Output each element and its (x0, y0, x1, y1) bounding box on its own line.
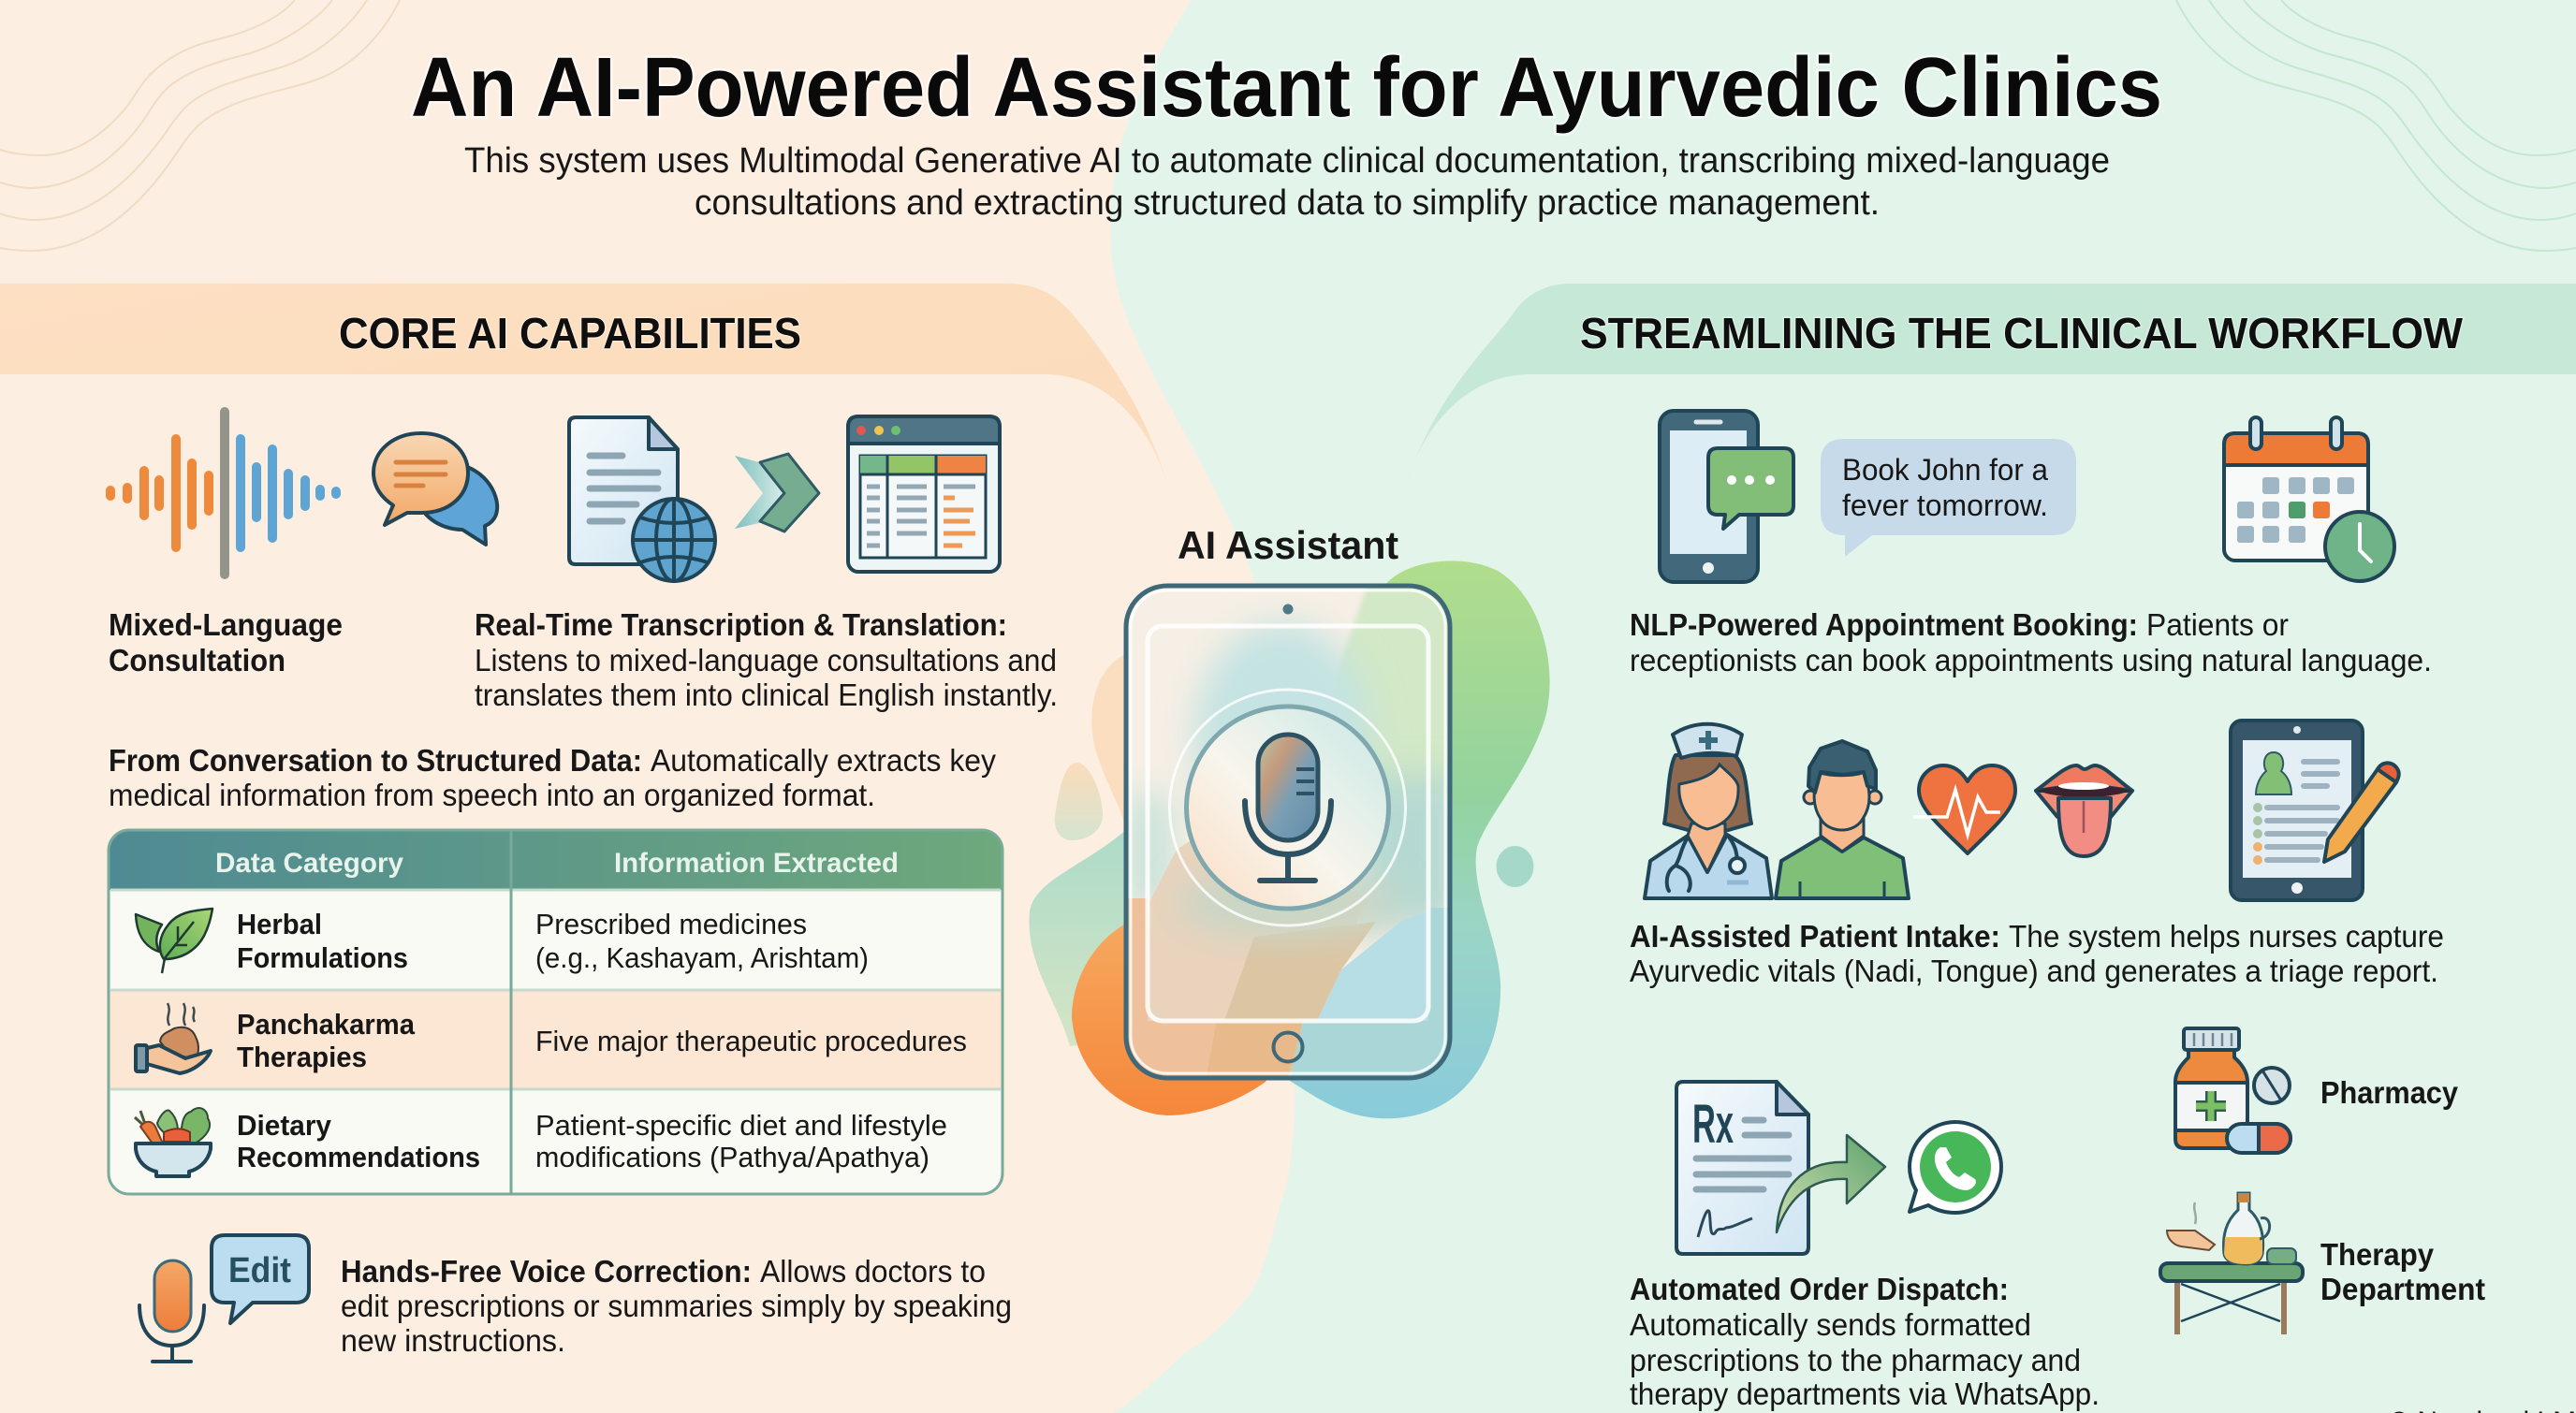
text block: AI-assisted patient intake: AI-Assisted Patient Intake: (1630, 919, 2000, 954)
icon: document with globe (569, 417, 715, 581)
table header (215, 848, 899, 879)
text block: hands-free voice correction: Allows doctors to (760, 1254, 986, 1289)
central colour blobs (1030, 561, 1550, 1118)
label: mixed-language consultation: Mixed-Language (109, 607, 343, 642)
text: prescribed medicines: (e.g., Kashayam, Arishtam) (535, 941, 869, 974)
text: dietary recommendations (237, 1109, 480, 1173)
subtitle: consultations and extracting structured data to simplify practice management. (695, 183, 1880, 223)
text: prescribed medicines: Prescribed medicines (535, 908, 807, 940)
label: therapy department (2320, 1237, 2485, 1306)
text block: NLP appointment booking: NLP-Powered Appointment Booking: (1630, 607, 2138, 642)
label: therapy department: Department (2320, 1272, 2485, 1306)
text block: hands-free voice correction: edit prescriptions or summaries simply by speaking (341, 1289, 1012, 1323)
icon: calendar with clock (2224, 417, 2394, 581)
microphone badge (1170, 690, 1406, 925)
text: dietary recommendations: Dietary (237, 1109, 332, 1142)
icon: WhatsApp (1910, 1122, 2001, 1213)
subtitle: This system uses Multimodal Generative AI to automate clinical documentation, transcribing mixed-language (464, 141, 2110, 181)
text block: real-time transcription: Real-Time Transcription & Translation: (475, 607, 1007, 642)
tablet with microphone (1114, 580, 1460, 1095)
heading: streamlining the clinical workflow: STREAMLINING THE CLINICAL WORKFLOW (1580, 309, 2464, 357)
text: panchakarma therapies: Therapies (237, 1041, 367, 1073)
table: data categories (109, 830, 1003, 1194)
icon: edit bubble (212, 1235, 309, 1323)
icon: phone with chat (1660, 411, 1793, 582)
decorative waves: top right (2176, 0, 2576, 251)
icon: nurse (1645, 724, 1772, 898)
label: therapy department: Therapy (2320, 1237, 2435, 1272)
text block: real-time transcription: translates them into clinical English instantly. (475, 677, 1058, 712)
icon: table window (848, 416, 1000, 572)
text: panchakarma therapies: Panchakarma (237, 1008, 416, 1041)
text block: conversation to structured data: Automatically extracts key (651, 743, 996, 778)
icon: heart with ECG (1913, 765, 2015, 853)
text block: AI-assisted patient intake (1630, 919, 2444, 988)
text block: NLP appointment booking (1630, 607, 2432, 677)
icon: herbal leaf (136, 909, 212, 973)
title: An AI-Powered Assistant for Ayurvedic Clinics (411, 41, 2162, 135)
text block: hands-free voice correction: Hands-Free Voice Correction: (341, 1254, 752, 1289)
icon: edit bubble: Edit (228, 1251, 291, 1290)
arrow: dispatch (1777, 1135, 1885, 1232)
label: mixed-language consultation (109, 607, 343, 677)
icon: waveform (110, 412, 336, 575)
tablet camera (1282, 605, 1294, 614)
label: mixed-language consultation: Consultation (109, 643, 285, 677)
text block: hands-free voice correction (341, 1254, 1012, 1358)
text block: AI-assisted patient intake: Ayurvedic vitals (Nadi, Tongue) and generates a triage report. (1630, 954, 2438, 988)
speech bubble: booking request: Book John for a (1842, 453, 2048, 487)
text block: real-time transcription: Listens to mixed-language consultations and (475, 643, 1057, 677)
icon: panchakarma hand (136, 1003, 211, 1073)
text block: automated order dispatch: prescriptions to the pharmacy and (1630, 1343, 2081, 1377)
text block: NLP appointment booking: receptionists can book appointments using natural language. (1630, 643, 2432, 677)
text: five major procedures: Five major therapeutic procedures (535, 1025, 967, 1057)
decorative waves: top left (0, 0, 400, 251)
text block: automated order dispatch: Automatically sends formatted (1630, 1307, 2031, 1342)
section band: streamlining workflow (1403, 284, 2576, 494)
speech bubble: booking request (1821, 439, 2076, 557)
text block: automated order dispatch: Automated Order Dispatch: (1630, 1272, 2009, 1306)
icon: pharmacy bottle (2175, 1028, 2291, 1153)
text: panchakarma therapies (237, 1008, 416, 1073)
heading: core AI capabilities: CORE AI CAPABILITIES (339, 309, 801, 357)
text block: AI-assisted patient intake: The system helps nurses capture (2009, 919, 2444, 954)
icon: tongue (2036, 765, 2132, 856)
icon: dietary bowl (135, 1108, 211, 1176)
text: diet modifications (535, 1109, 947, 1173)
icon: chat bubbles (373, 433, 497, 545)
text block: real-time transcription (475, 607, 1058, 712)
speech bubble: booking request: fever tomorrow. (1842, 488, 2048, 522)
subtitle (464, 141, 2110, 223)
section band: core AI capabilities (0, 284, 1170, 494)
table header: Data Category (215, 848, 403, 879)
text block: NLP appointment booking: Patients or (2146, 607, 2289, 642)
text block: hands-free voice correction: new instructions. (341, 1323, 565, 1358)
text block: conversation to structured data: From Conversation to Structured Data: (109, 743, 642, 778)
icon: patient (1776, 741, 1909, 898)
text: dietary recommendations: Recommendations (237, 1141, 480, 1173)
text: diet modifications: modifications (Pathya/Apathya) (535, 1141, 929, 1173)
text: prescribed medicines (535, 908, 869, 974)
background: mint right side (1110, 0, 2576, 1413)
text: herbal formulations: Formulations (237, 941, 408, 974)
table header: Information Extracted (614, 848, 899, 879)
text: herbal formulations: Herbal (237, 908, 322, 940)
icon: orange microphone (139, 1260, 204, 1362)
icon: tablet with pencil (2231, 721, 2399, 900)
text block: automated order dispatch (1630, 1272, 2100, 1411)
tablet home button (1273, 1033, 1303, 1061)
text: diet modifications: Patient-specific diet and lifestyle (535, 1109, 947, 1142)
icon: Rx document (1676, 1082, 1808, 1254)
text block: conversation to structured data: medical information from speech into an organized format. (109, 778, 875, 812)
label: AI assistant: AI Assistant (1178, 523, 1398, 567)
text: herbal formulations (237, 908, 408, 974)
icon: therapy table (2160, 1193, 2303, 1334)
label: pharmacy: Pharmacy (2320, 1075, 2459, 1110)
arrow: chevrons (735, 454, 819, 532)
text block: conversation to structured data (109, 743, 996, 812)
icon: Rx document: Rx (1692, 1094, 1734, 1155)
text block: automated order dispatch: therapy departments via WhatsApp. (1630, 1377, 2100, 1411)
